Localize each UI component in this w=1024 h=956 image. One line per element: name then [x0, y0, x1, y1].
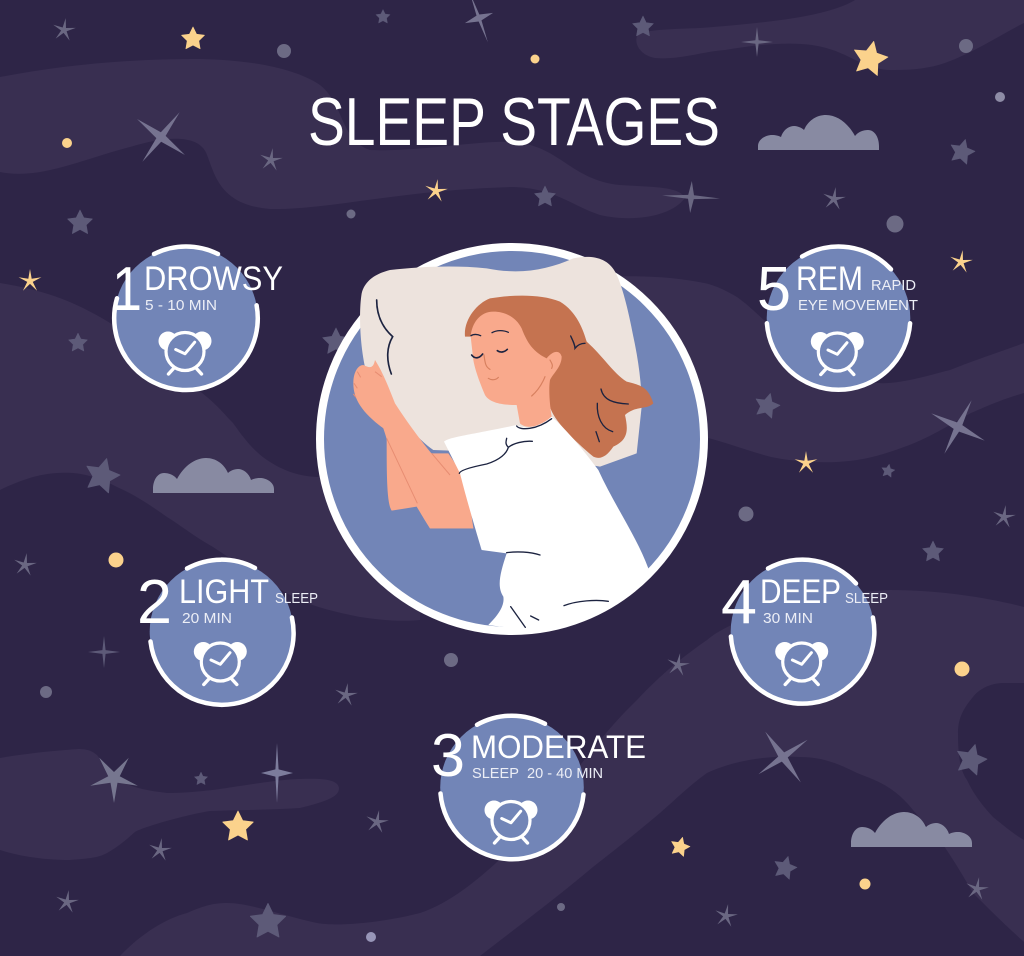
alarm clock icon — [484, 800, 538, 843]
alarm clock icon — [775, 642, 828, 684]
duration: 20 MIN — [182, 611, 232, 627]
pillow — [360, 257, 642, 467]
sparkles — [88, 0, 998, 803]
label suffix: RAPID — [871, 278, 916, 294]
face and neck — [471, 312, 562, 427]
title: SLEEP STAGES — [308, 84, 720, 160]
label suffix: SLEEP — [275, 591, 318, 607]
back arm — [387, 437, 473, 528]
cloud top right — [758, 115, 879, 150]
label: LIGHT — [179, 573, 269, 611]
subtitle: EYE MOVEMENT — [798, 298, 918, 314]
label: DEEP — [760, 573, 841, 611]
shirt — [444, 417, 648, 629]
duration: 5 - 10 MIN — [145, 298, 217, 314]
stage 5: REM — [757, 246, 918, 390]
label: DROWSY — [144, 260, 283, 298]
alarm clock icon — [811, 332, 864, 374]
face and clothing details — [459, 331, 628, 627]
number: 1 — [112, 255, 142, 324]
disc and ring — [767, 246, 910, 390]
blue circle with white ring — [320, 247, 704, 631]
central illustration: woman sleeping — [320, 247, 704, 631]
label suffix: SLEEP — [845, 591, 888, 607]
disc and ring — [114, 246, 258, 390]
stage 1: drowsy — [112, 246, 283, 390]
figure drawing — [353, 257, 653, 629]
gold dots — [62, 54, 970, 890]
alarm clock icon — [194, 642, 247, 684]
cloud bottom right — [851, 812, 972, 847]
alarm clock icon — [158, 332, 212, 374]
hand and forearm — [353, 360, 473, 528]
duration: SLEEP 20 - 40 MIN — [472, 766, 603, 782]
arm and finger lines — [353, 372, 450, 503]
duration: 30 MIN — [763, 611, 813, 627]
number: 3 — [431, 722, 465, 789]
stage 2: light sleep — [137, 560, 318, 705]
stage 3: moderate — [431, 716, 646, 859]
pillow crease — [377, 300, 393, 374]
number: 5 — [757, 255, 791, 324]
number: 4 — [721, 568, 757, 637]
hair back — [465, 296, 653, 458]
disc and ring — [731, 560, 874, 704]
disc and ring — [440, 716, 584, 859]
disc and ring — [150, 560, 294, 705]
cloud left — [153, 458, 274, 493]
label: REM — [796, 260, 863, 298]
stage 4: deep sleep — [721, 560, 888, 704]
label: MODERATE — [471, 729, 646, 765]
number: 2 — [137, 568, 172, 637]
